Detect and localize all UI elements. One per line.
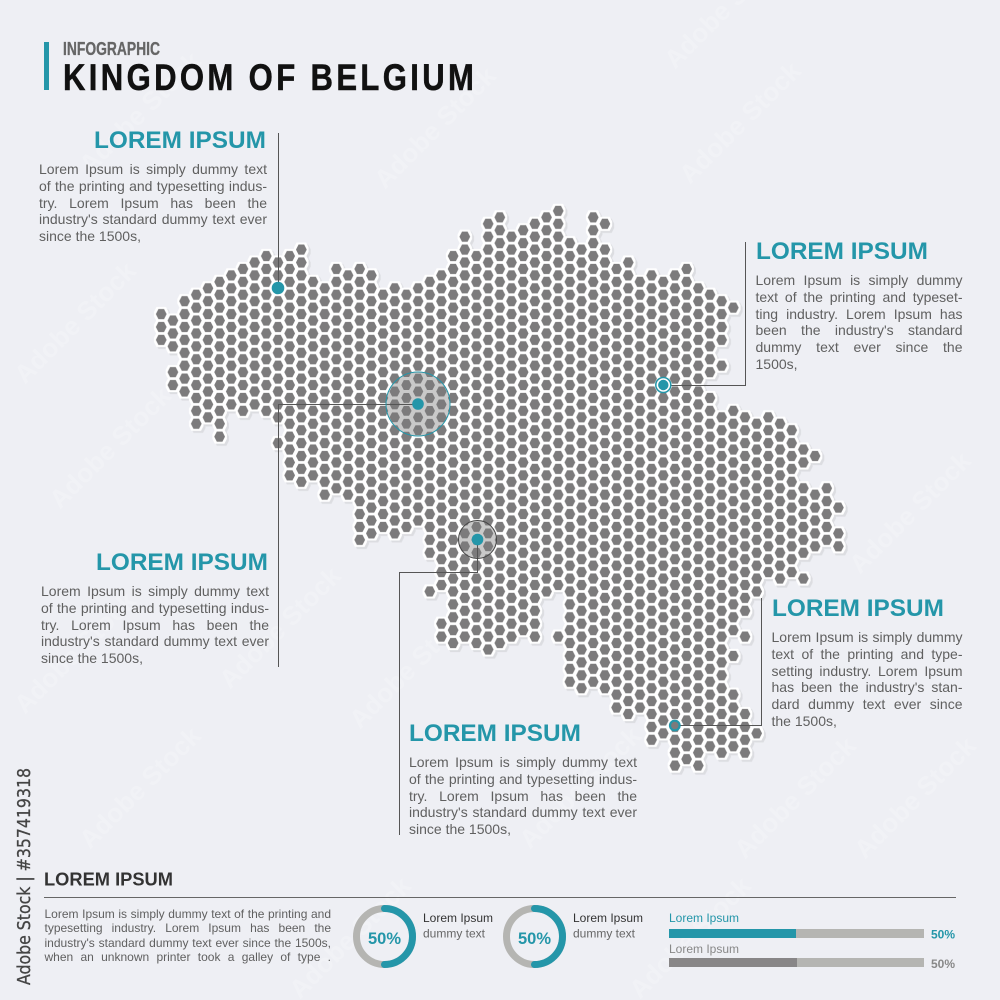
bottom paragraph: Lorem Ipsum is simply dummy text of the printing and: [44, 906, 331, 920]
panel: west callout: LOREM IPSUM: [96, 549, 268, 576]
marker: east ring: [656, 378, 671, 392]
donut 1 label: [423, 911, 493, 940]
panel: south callout: try. Lorem Ipsum has been the: [409, 788, 637, 804]
donut 2 label: [573, 911, 643, 940]
bottom paragraph: [44, 906, 331, 964]
text: Adobe Stock: [8, 585, 142, 719]
leader line: east callout: [663, 242, 746, 386]
progress bar 2: Lorem Ipsum: [669, 942, 739, 956]
donut 2 label: dummy text: [573, 926, 636, 940]
donut 1 label: Lorem Ipsum: [423, 911, 493, 925]
text: Adobe Stock: [343, 600, 477, 734]
panel: north-west callout: LOREM IPSUM: [94, 127, 266, 154]
progress bar 1: 50%: [931, 928, 955, 942]
panel: south callout: [409, 720, 637, 837]
panel: east callout: been the industry's standard: [756, 322, 962, 338]
text: Adobe Stock: [43, 380, 177, 514]
panel: east callout: ting industry. Lorem Ipsum has: [756, 306, 962, 322]
leader line: south callout: [400, 539, 478, 835]
donut chart 1: [356, 908, 412, 964]
panel: south callout: Lorem Ipsum is simply dummy text: [409, 754, 637, 770]
text: Adobe Stock: [8, 255, 142, 389]
progress bar 2: [669, 942, 955, 971]
donut chart 2: [506, 908, 562, 964]
bottom section heading: LOREM IPSUM: [44, 870, 173, 890]
panel: east callout: 1500s,: [756, 356, 798, 372]
leader line: north-west callout: [278, 133, 280, 288]
marker: north-west dot: [272, 282, 284, 294]
progress bar 1: Lorem Ipsum: [669, 911, 739, 925]
panel: south-east callout: text of the printing and type-: [772, 646, 962, 662]
panel: east callout: [756, 238, 962, 372]
panel: north-west callout: since the 1500s,: [39, 228, 141, 244]
leader line: south-east callout: [675, 598, 762, 726]
panel: east callout: Lorem Ipsum is simply dummy: [756, 272, 962, 288]
text: Adobe Stock: [73, 45, 207, 179]
panel: north-west callout: of the printing and typesetting indus-: [39, 178, 267, 194]
panel: north-west callout: try. Lorem Ipsum has been the: [39, 194, 267, 210]
panel: west callout: try. Lorem Ipsum has been the: [41, 616, 269, 632]
panel: south-east callout: dard dummy text ever since: [772, 696, 962, 712]
panel: west callout: since the 1500s,: [41, 650, 143, 666]
panel: east callout: text of the printing and typeset-: [756, 289, 962, 305]
main title: KINGDOM OF BELGIUM: [63, 58, 477, 99]
leader line: west callout: [278, 404, 418, 667]
panel: north-west callout: Lorem Ipsum is simply dummy text: [39, 161, 267, 177]
panel: north-west callout: industry's standard dummy text ever: [39, 211, 267, 227]
text: Adobe Stock: [673, 55, 807, 189]
panel: east callout: dummy text ever since the: [756, 339, 962, 355]
marker: large highlight circle: [386, 372, 450, 436]
progress bar 2: 50%: [931, 957, 955, 971]
bottom paragraph: when an unknown printer took a galley of type .: [44, 950, 331, 964]
panel: west callout: [41, 549, 269, 666]
donut 2 label: Lorem Ipsum: [573, 911, 643, 925]
panel: south-east callout: the 1500s,: [772, 713, 837, 729]
panel: south-east callout: [772, 595, 962, 729]
title label: INFOGRAPHIC: [63, 39, 160, 59]
panel: south-east callout: LOREM IPSUM: [772, 595, 943, 622]
accent bar: [44, 42, 49, 90]
text: Adobe Stock: [513, 720, 647, 854]
panel: west callout: industry's standard dummy text ever: [41, 633, 269, 649]
hexagon dot map of Belgium: [155, 204, 844, 772]
panel: west callout: of the printing and typesetting indus-: [41, 600, 269, 616]
text: Adobe Stock: [848, 730, 982, 864]
panel: west callout: Lorem Ipsum is simply dummy text: [41, 583, 269, 599]
text: Adobe Stock: [728, 730, 862, 864]
panel: south-east callout: setting industry. Lorem Ipsum: [772, 662, 962, 678]
bottom paragraph: industry's standard dummy text ever since the 1500s,: [44, 936, 331, 950]
panel: south callout: LOREM IPSUM: [409, 720, 581, 747]
text: Adobe Stock: [73, 720, 207, 854]
panel: south-east callout: has been the industry's stan-: [772, 679, 962, 695]
donut chart 2: 50%: [518, 930, 551, 948]
stock image id: Adobe Stock | #357419318: [14, 768, 35, 985]
panel: south callout: industry's standard dummy text ever: [409, 804, 637, 820]
donut 1 label: dummy text: [423, 926, 486, 940]
text: Adobe Stock: [368, 60, 502, 194]
panel: east callout: LOREM IPSUM: [756, 238, 927, 265]
panel: north-west callout: [39, 127, 267, 244]
text: Adobe Stock: [843, 445, 977, 579]
panel: south callout: of the printing and typesetting indus-: [409, 771, 637, 787]
progress bar 1: [669, 911, 955, 942]
text: Adobe Stock: [213, 560, 347, 694]
marker: south-east ring: [670, 721, 680, 730]
marker: small highlight circle: [458, 520, 496, 558]
bottom paragraph: typesetting industry. Lorem Ipsum has been the: [44, 921, 331, 935]
panel: south callout: since the 1500s,: [409, 821, 511, 837]
panel: south-east callout: Lorem Ipsum is simply dummy: [772, 629, 962, 645]
donut chart 1: 50%: [368, 930, 401, 948]
